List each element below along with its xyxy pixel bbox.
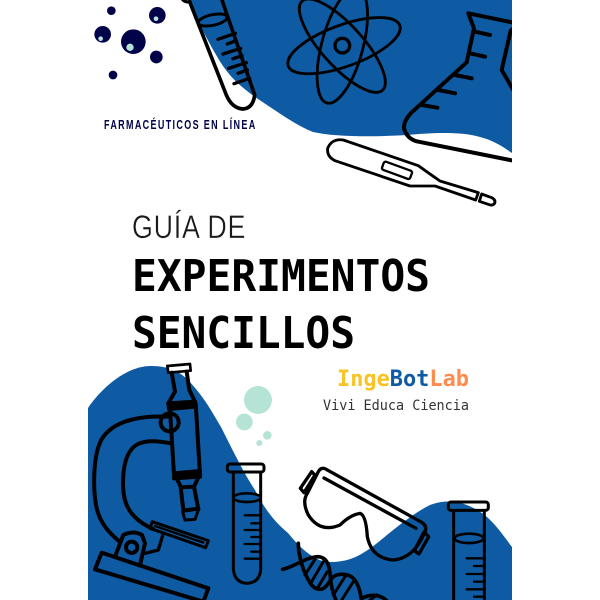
icon: atom (286, 0, 402, 105)
title line: guía de: GUÍA DE (132, 210, 245, 246)
tagline: Vivi Educa Ciencia (323, 398, 469, 414)
icon: microscope (94, 364, 208, 600)
icon: top test tube (183, 0, 255, 109)
title line: sencillos: SENCILLOS (132, 308, 355, 359)
icon: bottom test tube (227, 464, 264, 583)
navy molecule dots (94, 6, 166, 79)
icon: thermometer (328, 140, 495, 205)
icon: safety goggles (300, 468, 429, 560)
logo: IngeBotLab: IngeBotLab (337, 367, 469, 392)
icon: bottom right graduated cylinder (448, 502, 488, 600)
title line: experimentos: EXPERIMENTOS (132, 251, 430, 302)
bottom blue wave panel (88, 366, 512, 600)
top blue wave panel (188, 0, 512, 153)
microscope base (95, 522, 208, 600)
icon: DNA helix (283, 543, 387, 600)
mint bubbles (236, 386, 272, 446)
icon: flask (404, 13, 513, 161)
cover page (88, 0, 512, 600)
brand label: farmacéuticos en línea: FARMACÉUTICOS EN LÍNEA (104, 118, 255, 132)
